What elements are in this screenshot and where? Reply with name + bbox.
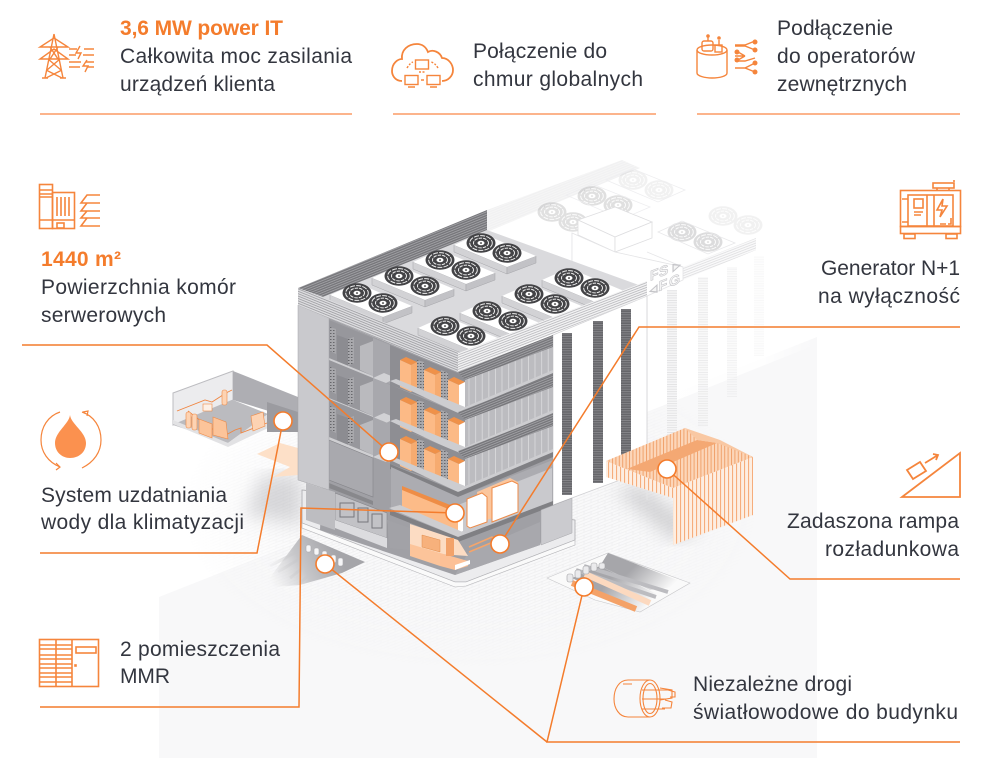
icon: cable [697,34,758,78]
leader: water [40,421,283,553]
panel: power [40,17,352,114]
roof back parapet [298,210,487,297]
server floor 3 [329,399,553,497]
text [41,276,236,327]
loading ramp canopy [606,428,753,545]
server floor 2 [329,360,553,458]
text: Powierzchnia komór [41,276,236,299]
text: światłowodowe do budynku [693,701,958,724]
heading: 3,6 MW power IT [120,17,283,40]
fourth level power room [329,460,553,542]
text [40,484,244,534]
text [787,510,959,561]
left pillar [298,305,329,490]
text: wody dla klimatyzacji [40,511,244,534]
marker dots [274,412,676,596]
text: chmur globalnych [473,68,643,91]
panel: server room area [40,184,236,327]
text: Zadaszona rampa [787,510,959,533]
text: MMR [120,665,170,688]
text: serwerowych [41,304,166,327]
panel: cloud [392,40,656,114]
ground paving [262,438,634,598]
text: na wyłączność [818,285,960,308]
third floor left wall [329,440,373,497]
panel: fibre routes [614,673,958,724]
text [777,17,916,96]
text: do operatorów [777,45,916,68]
panel: MMR [40,638,280,688]
leader: server rooms [22,345,389,452]
roof front parapet left [298,288,458,372]
ground floor orange room [387,520,540,575]
text [473,40,643,91]
lower right pillar base [541,498,572,545]
roof units [330,233,624,357]
icon: fibre bundle [614,680,675,717]
ghost logo text: FS ▸ [650,257,682,285]
ghost logo text [649,257,682,299]
roof surface [323,230,647,355]
ghost logo text: ◂FG [649,271,680,299]
icon: ramp [902,453,960,497]
right fibre duct pit [547,553,690,612]
building [298,210,647,587]
lower left pillar base [306,483,335,530]
text: Połączenie do [473,40,607,63]
panel: generator [818,180,960,308]
ground floor left room [335,493,387,548]
interior base [320,318,553,575]
text [120,638,280,688]
text [693,673,958,724]
right facade with slots [553,296,647,505]
leader: MMR [40,508,455,707]
ghost neighbouring building [487,160,815,500]
server floor 1 [329,320,553,418]
text: urządzeń klienta [120,73,275,96]
text: 2 pomieszczenia [120,638,280,661]
text: Całkowita moc zasilania [120,45,352,68]
icon: generator [900,180,960,238]
text: Generator N+1 [821,257,960,280]
text: rozładunkowa [825,538,959,561]
leader: generator [500,327,960,544]
text: zewnętrznych [777,73,907,96]
left fibre duct pit [262,535,365,588]
icon: pylon [40,34,94,78]
panel: ramp [787,453,960,561]
icon: water drop [41,411,101,470]
icon: cloud [392,44,453,87]
leader: fibre routes [547,587,960,742]
text: Niezależne drogi [693,673,852,696]
text [818,257,960,308]
leader: ramp [667,469,960,579]
text: Podłączenie [777,17,893,40]
background panel [159,337,817,758]
roof front parapet right [458,281,647,372]
ground shadows [245,475,700,540]
leader: fibre left branch [325,564,547,742]
panel: water system [40,411,244,534]
heading: 1440 m² [41,248,121,271]
icon: MMR [40,640,98,686]
icon: server room [40,184,100,228]
building base platform [302,490,575,582]
text: System uzdatniania [41,484,227,507]
text [120,45,352,96]
panel: operators [697,17,960,114]
water treatment building [173,371,298,477]
